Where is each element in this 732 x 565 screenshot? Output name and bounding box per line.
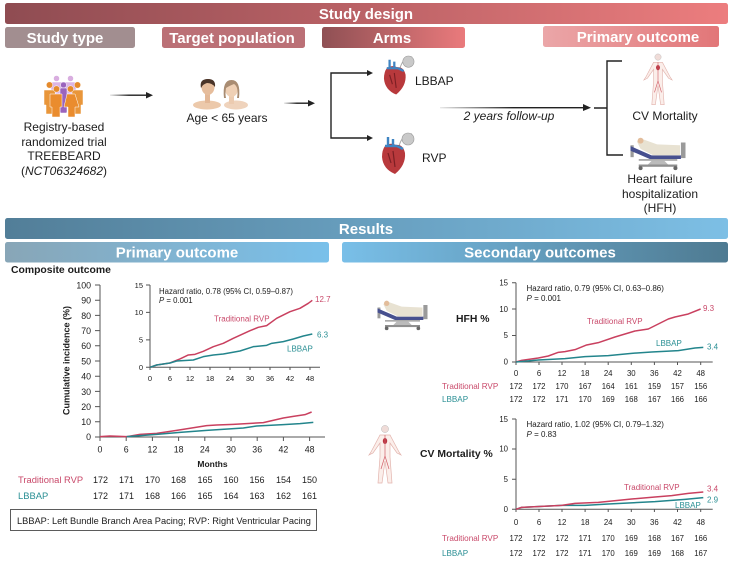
table: composite numbers at risk: 156 [249,475,265,485]
chart: inset composite outcome: 42 [286,374,294,383]
chart: CV mortality: 0 [504,505,509,514]
table: CV mortality numbers at risk: 172 [555,534,569,543]
chart: CV mortality: Hazard ratio, 1.02 (95% CI, 0.79–1.32) [526,420,664,429]
chart: CV mortality: 12 [558,518,566,527]
chart: HFH: 48 [696,369,705,378]
table: composite numbers at risk: 165 [197,475,213,485]
text: study type description: TREEBEARD [27,149,101,163]
chart: HFH: 42 [673,369,682,378]
curve: RVP inset [150,300,312,367]
table: composite numbers at risk: 164 [223,491,239,501]
chart: HFH: 18 [581,369,589,378]
table: HFH numbers at risk: LBBAP [442,395,468,404]
table: HFH numbers at risk: 166 [694,395,707,404]
text: RVP arm: RVP [422,151,446,165]
chart: HFH: 36 [650,369,659,378]
chart: composite outcome main: 100 [76,280,91,290]
chart: inset composite outcome: 48 [306,374,314,383]
table: CV mortality numbers at risk: 168 [671,549,684,558]
table: CV mortality numbers at risk: 169 [648,549,661,558]
heading: arms: Arms [373,30,411,47]
table: composite numbers at risk: 170 [145,475,160,485]
table: composite numbers at risk: 165 [197,491,213,501]
table: HFH numbers at risk: 172 [509,395,523,404]
legend: abbreviations: LBBAP: Left Bundle Branch Area Pacing; RVP: Right Ventricular Pacing [17,516,311,526]
chart: HFH: P = 0.001 [526,294,562,303]
curve: LBBAP inset [150,334,312,367]
chart: composite outcome main: 18 [174,444,184,454]
table: CV mortality numbers at risk: LBBAP [442,549,468,558]
chart: CV mortality: 6 [537,518,541,527]
chart: HFH: 10 [499,305,509,314]
chart: composite outcome main: 6 [124,444,129,454]
chart: CV mortality: 10 [499,444,509,454]
heading: study design: Study design [319,6,413,23]
table: CV mortality numbers at risk: 170 [602,534,615,543]
curve: RVP composite [100,412,312,437]
table: HFH numbers at risk: 161 [625,382,638,391]
chart: inset composite outcome: 5 [139,336,143,344]
chart: HFH: 5 [504,331,509,340]
chart: inset composite outcome: LBBAP [287,344,313,354]
heading: primary outcome [543,26,719,47]
chart: inset composite outcome: P = 0.001 [159,296,193,305]
icon: man and woman [193,79,248,110]
chart: inset composite outcome: 6.3 [317,330,329,340]
chart: composite outcome main: 60 [81,341,91,351]
chart: composite outcome main: Cumulative incidence (%) [62,306,72,415]
chart: CV mortality: 3.4 [707,484,719,494]
chart: composite outcome main [62,280,325,469]
chart: inset composite outcome: 24 [226,374,234,383]
chart: CV mortality: Traditional RVP [624,483,680,492]
arrow: outcome bracket [594,61,623,155]
icon: small hospital bed [378,301,428,330]
table: CV mortality numbers at risk: 167 [671,534,684,543]
chart: CV mortality [499,415,719,527]
curve: LBBAP composite [127,422,313,437]
heading: secondary outcomes [342,242,728,262]
heading: results: Results [339,221,393,238]
curve: LBBAP CV mortality [516,498,703,509]
table: composite numbers at risk: 168 [171,475,186,485]
icon: human body [644,54,672,105]
heading: results [5,218,728,239]
table: HFH numbers at risk: 164 [602,382,615,391]
chart: HFH: 0 [504,358,509,366]
chart: inset composite outcome: 15 [135,281,143,290]
curve: LBBAP HFH [516,347,703,362]
table: composite numbers at risk [18,474,317,501]
heading: study type [5,27,135,48]
chart: CV mortality: 36 [650,518,659,527]
chart: composite outcome main: 12 [148,444,157,454]
table: HFH numbers at risk: 166 [671,395,684,404]
chart: CV mortality: 48 [696,518,705,527]
table: HFH numbers at risk: 167 [648,395,661,404]
chart: inset composite outcome: 30 [246,374,254,383]
heading: secondary outcomes: Secondary outcomes [464,244,616,262]
heading: primary outcome results [5,242,329,262]
table: composite numbers at risk: 171 [119,491,134,501]
chart: HFH [499,278,719,378]
heading: target population: Target population [169,30,295,47]
chart: HFH: 6 [537,369,541,378]
chart: inset composite outcome: 0 [148,374,152,383]
table: HFH numbers at risk: 156 [694,382,707,391]
chart: composite outcome main: 36 [252,444,262,454]
table: composite numbers at risk: Traditional RVP [18,474,83,485]
icon: group of people [44,76,83,117]
chart: CV mortality: 5 [504,475,509,484]
table: composite numbers at risk: 172 [93,475,108,485]
chart: CV mortality: 24 [604,518,613,527]
arrow: randomization bracket [331,70,373,141]
table: HFH numbers at risk: 171 [555,395,569,404]
heading: composite outcome: Composite outcome [11,265,111,276]
text: heart failure hospitalization: hospitalization [622,187,698,201]
table: CV mortality numbers at risk: 169 [625,534,638,543]
arrow: study type to population [110,92,153,98]
table: CV mortality numbers at risk: 171 [579,534,592,543]
chart: inset composite outcome: 12 [186,374,194,383]
chart: inset composite outcome: 10 [135,308,143,317]
table: CV mortality numbers at risk: 172 [532,549,546,558]
chart: HFH: 0 [514,369,519,378]
icon: hospital bed [630,138,686,170]
chart: inset composite outcome: 18 [206,374,214,383]
arrow: follow-up [440,104,591,111]
text: CV mortality label: CV Mortality % [420,449,493,460]
chart: composite outcome main: 30 [81,387,91,397]
chart: composite outcome main: 42 [279,444,288,454]
table: HFH numbers at risk: 172 [532,395,546,404]
curve: RVP HFH [516,309,701,362]
icon: RVP heart with pacemaker [382,133,414,174]
table: HFH numbers at risk: 159 [648,382,661,391]
text: study type description: Registry-based [24,120,104,134]
icon: small human body [369,425,401,483]
curve: RVP CV mortality [516,492,703,509]
chart: composite outcome main: 70 [81,326,91,336]
table: CV mortality numbers at risk: 170 [602,549,615,558]
chart: CV mortality: 2.9 [707,496,719,504]
chart: composite outcome main: 80 [81,311,91,321]
table: HFH numbers at risk: 169 [602,395,615,404]
table: composite numbers at risk: 162 [276,491,291,501]
chart: composite outcome main: 20 [81,402,91,412]
table: HFH numbers at risk: 157 [671,382,684,391]
table: CV mortality numbers at risk: 171 [579,549,592,558]
chart: CV mortality: P = 0.83 [526,430,557,439]
chart: HFH: Traditional RVP [587,317,643,326]
table: CV mortality numbers at risk: Traditional RVP [442,534,498,543]
table: composite numbers at risk: 160 [223,475,239,485]
table: composite numbers at risk: 172 [93,491,108,501]
text: heart failure hospitalization [622,172,698,215]
table: composite numbers at risk: 163 [249,491,265,501]
chart: HFH: 15 [499,278,509,288]
text: CV mortality: CV Mortality [632,109,698,123]
chart: composite outcome main: 30 [226,444,236,454]
chart: composite outcome main: 0 [86,432,91,442]
table: CV mortality numbers at risk: 172 [509,534,523,543]
legend: abbreviations [10,510,316,530]
chart: CV mortality: 30 [627,518,636,527]
table: composite numbers at risk: 150 [302,475,317,485]
icon: LBBAP heart with pacemaker [384,56,414,95]
table: CV mortality numbers at risk: 172 [555,549,569,558]
table: HFH numbers at risk [442,382,707,404]
chart: composite outcome main: 90 [81,296,91,306]
text: heart failure hospitalization: Heart failure [627,172,693,186]
chart: composite outcome main: 40 [81,372,91,382]
chart: CV mortality: 15 [499,415,509,424]
table: composite numbers at risk: 166 [171,491,186,501]
chart: composite outcome main: 48 [305,444,315,454]
text: follow-up duration: 2 years follow-up [463,109,555,123]
chart: composite outcome main: 0 [98,444,103,454]
heading: primary outcome results: Primary outcome [116,244,238,262]
chart: HFH: Hazard ratio, 0.79 (95% CI, 0.63–0.86) [526,284,664,293]
chart: inset composite outcome: Hazard ratio, 0.78 (95% CI, 0.59–0.87) [159,287,293,296]
text: age criterion: Age < 65 years [186,111,268,125]
text: study type description: (NCT06324682) [21,164,107,178]
chart: inset composite outcome: 6 [168,374,172,383]
text: LBBAP arm: LBBAP [415,74,454,88]
table: composite numbers at risk: 161 [302,491,317,501]
heading: study type: Study type [27,30,103,47]
text: study type description [21,120,107,178]
table: HFH numbers at risk: 172 [509,382,523,391]
chart: CV mortality: 0 [514,518,519,527]
text: HFH label: HFH % [456,314,489,325]
chart: inset composite outcome: 12.7 [315,295,331,304]
text: heart failure hospitalization: (HFH) [644,201,676,215]
table: CV mortality numbers at risk: 169 [625,549,638,558]
table: CV mortality numbers at risk: 172 [532,534,546,543]
chart: CV mortality: LBBAP [675,501,701,510]
chart: inset composite outcome: Traditional RVP [214,314,270,324]
heading: primary outcome: Primary outcome [577,29,699,46]
table: HFH numbers at risk: 170 [555,382,569,391]
table: CV mortality numbers at risk: 172 [509,549,523,558]
heading: arms [322,27,465,48]
chart: composite outcome main: 50 [81,356,91,366]
table: CV mortality numbers at risk [442,534,707,558]
table: composite numbers at risk: LBBAP [18,490,48,501]
chart: HFH: 3.4 [707,342,719,352]
table: CV mortality numbers at risk: 166 [694,534,707,543]
chart: composite outcome main: 24 [200,444,210,454]
table: composite numbers at risk: 168 [145,491,160,501]
chart: HFH: 12 [558,369,566,378]
table: CV mortality numbers at risk: 168 [648,534,661,543]
table: HFH numbers at risk: 170 [579,395,592,404]
chart: HFH: 9.3 [703,304,715,313]
chart: HFH: LBBAP [656,339,682,348]
text: study type description: randomized trial [21,135,107,149]
chart: composite outcome main: Months [197,459,228,469]
heading: study design [5,3,728,24]
chart: HFH: 24 [604,369,613,378]
chart: inset composite outcome: 36 [266,374,274,383]
table: composite numbers at risk: 154 [276,475,291,485]
chart: CV mortality: 42 [673,518,682,527]
arrow: population to arms [284,100,315,106]
chart: CV mortality: 18 [581,518,589,527]
table: composite numbers at risk: 171 [119,475,134,485]
chart: HFH: 30 [627,369,636,378]
table: HFH numbers at risk: 168 [625,395,638,404]
chart: inset composite outcome: 0 [139,363,143,372]
table: HFH numbers at risk: Traditional RVP [442,382,498,391]
table: HFH numbers at risk: 172 [532,382,546,391]
chart: composite outcome main: 10 [81,417,91,427]
chart: inset composite outcome [135,281,331,383]
table: CV mortality numbers at risk: 167 [694,549,707,558]
table: HFH numbers at risk: 167 [579,382,592,391]
